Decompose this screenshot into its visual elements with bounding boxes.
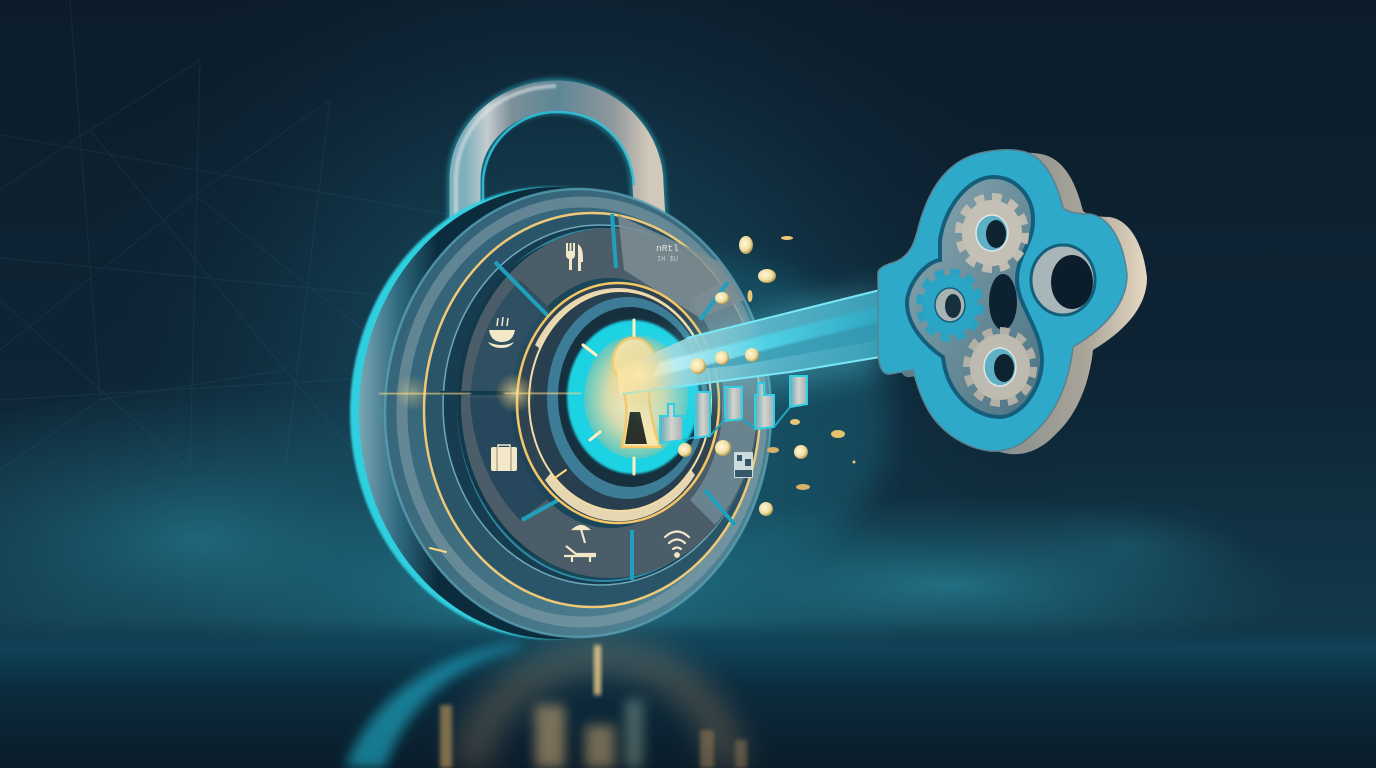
gear window bbox=[907, 177, 1042, 417]
key shaft glow bbox=[620, 285, 880, 412]
gear: top silver bbox=[961, 200, 1023, 266]
key shaft bbox=[617, 290, 882, 395]
key bow back edge bbox=[898, 153, 1147, 454]
icon: wifi bbox=[665, 532, 689, 557]
key bow hole bbox=[1031, 245, 1095, 315]
panel ring bbox=[486, 253, 734, 553]
icon: fork and knife bbox=[566, 243, 583, 271]
spark lines bbox=[380, 320, 634, 552]
icon: suitcase bbox=[491, 445, 517, 471]
icon: sun lounger bbox=[564, 526, 596, 562]
flying coins bbox=[678, 236, 856, 516]
padlock body bbox=[350, 187, 771, 639]
inner gold ring bbox=[517, 283, 719, 523]
floor reflection bbox=[345, 642, 747, 768]
panel separators bbox=[440, 214, 735, 580]
panel label small text: IH $U bbox=[657, 256, 678, 264]
icon: info card bbox=[734, 452, 753, 478]
cyan back rim bbox=[350, 187, 748, 639]
padlock shackle bbox=[456, 86, 650, 225]
dark panel track bbox=[443, 225, 757, 585]
panel label text: nRtl bbox=[656, 243, 679, 254]
outer face bbox=[385, 189, 771, 637]
background grid lines bbox=[0, 0, 450, 470]
gold outer ring bbox=[424, 213, 760, 607]
key bow face bbox=[878, 150, 1127, 451]
keyhole bbox=[613, 338, 660, 447]
gear: bottom silver bbox=[969, 334, 1031, 400]
floor bbox=[0, 622, 1376, 768]
cyan ring bbox=[567, 320, 699, 474]
key bits bbox=[660, 376, 807, 443]
icon: coffee cup bbox=[488, 317, 515, 348]
key bbox=[602, 150, 1147, 454]
blue ring bbox=[547, 297, 707, 499]
gear: middle blue bbox=[922, 275, 978, 335]
